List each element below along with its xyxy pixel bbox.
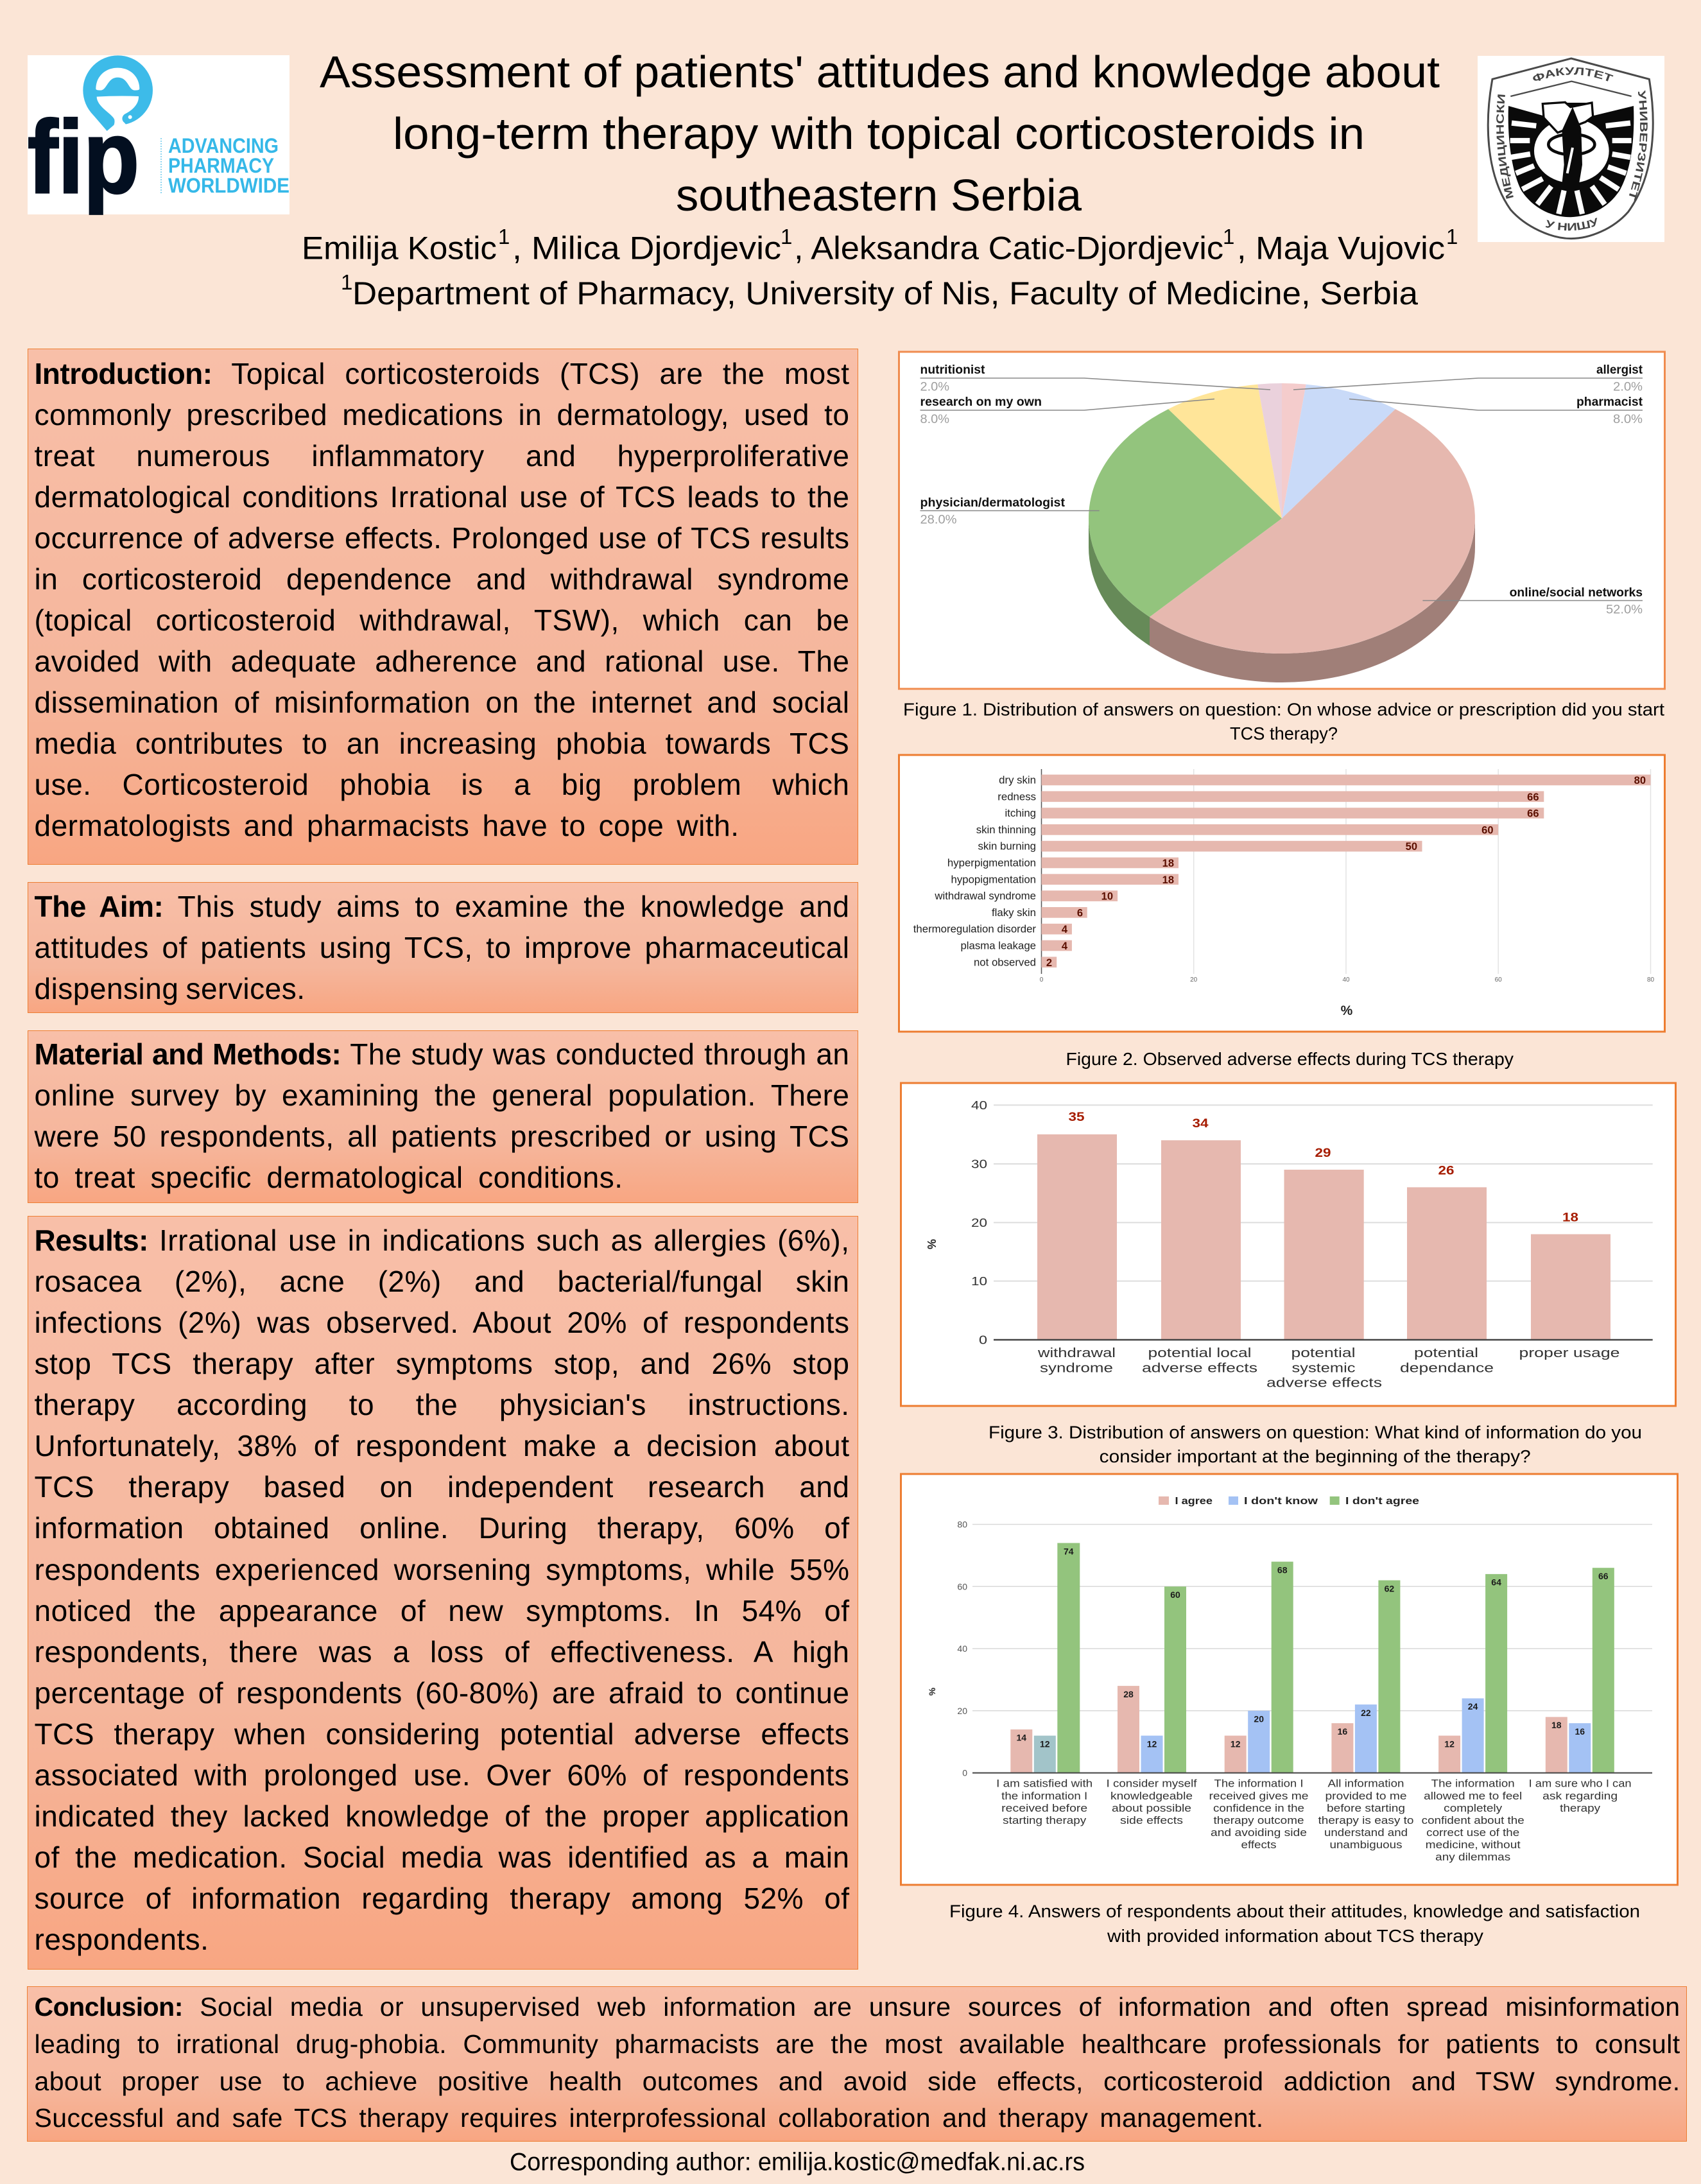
pie percentages: 2.0% [1613, 380, 1643, 394]
column values: 18 [1562, 1211, 1578, 1225]
text: results paragraph: Unfortunately, 38% of respondent make a decision about [35, 1429, 850, 1462]
group labels: side effects [1120, 1814, 1183, 1826]
text: results paragraph: respondents, there was a loss of effectiveness. A high [35, 1635, 850, 1668]
group labels: I am sure who I can [1529, 1777, 1632, 1790]
column categories: systemic [1291, 1361, 1356, 1375]
title: southeastern Serbia [676, 170, 1082, 220]
group labels: received gives me [1209, 1790, 1308, 1802]
text: introduction paragraph: media contributes to an increasing phobia towards TCS [35, 727, 850, 760]
pie labels: pharmacist [1576, 395, 1643, 409]
panel: figure 4 grouped column chart [901, 1474, 1678, 1885]
panel: conclusion [27, 1986, 1687, 2142]
text: advancing pharmacy worldwide tagline [168, 134, 289, 197]
bars: I don't know [1034, 1699, 1591, 1773]
authors: , Milica Djordjevic [512, 230, 781, 266]
bar values: 68 [1277, 1565, 1288, 1575]
authors [302, 225, 1458, 266]
group labels: allowed me to feel [1424, 1790, 1522, 1802]
caption: figure 3: Figure 3. Distribution of answers on question: What kind of information do you [989, 1423, 1642, 1442]
text: conclusion paragraph: Conclusion: Social media or unsupervised web information are unsure sources of information and often spread misinformation [35, 1992, 1680, 2022]
bar values: 12 [1444, 1738, 1455, 1749]
caption: figure 4 [949, 1902, 1640, 1946]
group labels: knowledgeable [1110, 1790, 1193, 1802]
logo: University of Nis medical faculty crest [1478, 56, 1664, 242]
authors: 1 [1446, 225, 1458, 248]
legend: I don't agree [1345, 1496, 1419, 1507]
column categories: dependance [1400, 1361, 1494, 1375]
caption: figure 1 [903, 700, 1664, 743]
column values: 26 [1438, 1165, 1455, 1177]
text: results paragraph: noticed the appearance of new symptoms. In 54% of [35, 1594, 850, 1627]
bar values: 60 [1170, 1590, 1180, 1600]
caption: figure 4: with provided information about TCS therapy [1107, 1926, 1483, 1946]
bar values [1046, 775, 1646, 969]
pie labels: nutritionist [920, 363, 985, 377]
bar values: 18 [1162, 858, 1174, 869]
text: introduction paragraph: (topical corticosteroid withdrawal, TSW), which can be [35, 603, 850, 637]
bar values: 74 [1064, 1546, 1074, 1556]
column values: 34 [1193, 1117, 1209, 1131]
x axis ticks: 40 [1342, 976, 1350, 984]
logo: FIP advancing pharmacy worldwide [28, 55, 289, 215]
group labels: provided to me [1325, 1790, 1407, 1802]
column categories: proper usage [1519, 1346, 1620, 1360]
x axis ticks: 80 [1647, 976, 1654, 984]
bar category labels: skin burning [978, 840, 1036, 853]
panel: the aim [28, 882, 858, 1013]
grid lines [994, 1105, 1653, 1281]
group labels: I consider myself [1107, 1777, 1197, 1790]
bar values: 60 [1481, 824, 1493, 836]
caption: figure 1: Figure 1. Distribution of answers on question: On whose advice or prescription did you start [903, 700, 1664, 719]
text: methods paragraph: online survey by examining the general population. There [35, 1079, 850, 1112]
columns [1037, 1134, 1610, 1340]
text: results paragraph: indicated they lacked knowledge of the proper application [35, 1799, 850, 1833]
grid lines [1194, 769, 1651, 974]
panel: results [28, 1216, 858, 1970]
x axis ticks: 0 [1040, 976, 1044, 984]
text: conclusion paragraph [35, 1992, 1680, 2133]
group labels [996, 1777, 1632, 1863]
pie percentages: 2.0% [920, 380, 949, 394]
x axis title: % [1341, 1003, 1353, 1018]
text: introduction paragraph: in corticosteroid dependence and withdrawal syndrome [35, 562, 850, 596]
text: results paragraph: rosacea (2%), acne (2%) and bacterial/fungal skin [35, 1265, 850, 1298]
bar category labels: hypopigmentation [951, 873, 1036, 885]
panel: material and methods [28, 1030, 858, 1203]
caption: figure 3 [989, 1423, 1642, 1466]
bar category labels: plasma leakage [960, 940, 1036, 951]
x axis ticks: 20 [1190, 976, 1198, 984]
legend: I don't know [1244, 1496, 1318, 1507]
panel: figure 2 horizontal bar chart [899, 755, 1665, 1032]
bar values: 20 [1254, 1714, 1264, 1724]
group labels: confident about the [1422, 1814, 1524, 1826]
pie labels: allergist [1596, 363, 1643, 377]
column values: 35 [1068, 1111, 1085, 1124]
group labels: starting therapy [1003, 1814, 1087, 1826]
y axis labels: 0 [979, 1334, 987, 1347]
text: aim paragraph [35, 890, 850, 1005]
text: results paragraph: percentage of respondents (60-80%) are afraid to continue [35, 1676, 850, 1710]
text: results paragraph: of the medication. Social media was identified as a main [35, 1841, 850, 1874]
bar values: 64 [1491, 1577, 1501, 1587]
bar category labels: thermoregulation disorder [913, 923, 1036, 935]
group labels: therapy [1560, 1802, 1601, 1814]
corresponding author: Corresponding author: emilija.kostic@medfak.ni.ac.rs [510, 2148, 1085, 2176]
legend [1159, 1496, 1419, 1507]
bar values: 80 [1634, 775, 1646, 786]
text: aim paragraph: dispensing services. [35, 972, 306, 1005]
pie percentages: 28.0% [920, 512, 956, 526]
group labels: therapy is easy to [1318, 1814, 1413, 1826]
text: methods paragraph: Material and Methods: The study was conducted through an [35, 1037, 850, 1071]
panel: figure 3 column chart [901, 1083, 1675, 1406]
pie percentages: 8.0% [1613, 412, 1643, 426]
group labels: The information I [1214, 1777, 1303, 1790]
bar values: 12 [1040, 1738, 1050, 1749]
text: introduction paragraph: treat numerous inflammatory and hyperproliferative [35, 439, 850, 472]
column categories: potential [1414, 1346, 1478, 1360]
text: introduction paragraph: commonly prescribed medications in dermatology, used to [35, 398, 850, 431]
authors: 1 [1223, 225, 1234, 248]
column values [1068, 1111, 1578, 1225]
text: aim paragraph: The Aim: This study aims to examine the knowledge and [35, 890, 850, 923]
group labels: medicine, without [1426, 1839, 1521, 1851]
group labels: I am satisfied with [996, 1777, 1092, 1790]
bar values: 12 [1147, 1738, 1157, 1749]
group labels: and avoiding side [1211, 1826, 1307, 1839]
group labels: unambiguous [1330, 1839, 1402, 1851]
text: results paragraph: associated with prolonged use. Over 60% of respondents [35, 1758, 850, 1792]
group labels: understand and [1324, 1826, 1408, 1839]
text: crest inscription: МЕДИЦИНСКИ [1496, 94, 1514, 199]
text: advancing pharmacy worldwide tagline: WORLDWIDE [168, 174, 289, 197]
text: results paragraph: information obtained online. During therapy, 60% of [35, 1511, 850, 1545]
group labels: The information [1431, 1777, 1515, 1790]
bars: I agree [1010, 1686, 1567, 1773]
authors: , Aleksandra Catic-Djordjevic [794, 230, 1223, 266]
bar category labels: not observed [974, 956, 1036, 968]
authors: 1 [498, 225, 510, 248]
group labels: received before [1001, 1802, 1087, 1814]
authors: , Maja Vujovic [1237, 230, 1445, 266]
title: Assessment of patients' attitudes and knowledge about [320, 47, 1440, 97]
bar values: 18 [1162, 874, 1174, 886]
text: advancing pharmacy worldwide tagline: PHARMACY [168, 154, 274, 177]
text: introduction paragraph: avoided with adequate adherence and rational use. The [35, 645, 850, 678]
bar category labels: redness [997, 790, 1036, 802]
group labels: ask regarding [1542, 1790, 1618, 1802]
bar values: 66 [1598, 1571, 1609, 1581]
caption: figure 1: TCS therapy? [1230, 724, 1338, 743]
column categories: syndrome [1040, 1361, 1113, 1375]
bar values: 2 [1046, 957, 1052, 969]
y axis title: % [927, 1687, 937, 1695]
text: conclusion paragraph: Successful and safe TCS therapy requires interprofessional collaboration and therapy management. [35, 2103, 1263, 2133]
y axis labels [957, 1519, 967, 1778]
y axis labels: 30 [971, 1158, 987, 1171]
column values: 29 [1315, 1147, 1331, 1160]
group labels: about possible [1112, 1802, 1191, 1814]
text: introduction paragraph: use. Corticosteroid phobia is a big problem which [35, 768, 850, 801]
text: introduction paragraph: dissemination of misinformation on the internet and social [35, 686, 850, 719]
x axis ticks [1040, 976, 1654, 984]
group labels: before starting [1327, 1802, 1405, 1814]
text: results paragraph: TCS therapy based on independent research and [35, 1470, 850, 1504]
bar category labels: skin thinning [976, 824, 1036, 836]
bar values: 24 [1468, 1701, 1478, 1712]
text: methods paragraph: to treat specific dermatological conditions. [35, 1161, 623, 1194]
group labels: therapy outcome [1213, 1814, 1304, 1826]
text: fip wordmark: fip [28, 100, 139, 215]
text: results paragraph: source of information regarding therapy among 52% of [35, 1882, 850, 1915]
y axis labels [971, 1099, 987, 1347]
y axis labels: 80 [957, 1519, 967, 1529]
bar values: 6 [1077, 907, 1083, 919]
y axis labels: 40 [957, 1643, 967, 1654]
affiliation: 1 [341, 270, 352, 294]
pie percentages: 52.0% [1606, 602, 1643, 616]
text: introduction paragraph: occurrence of adverse effects. Prolonged use of TCS results [35, 521, 850, 555]
column categories: adverse effects [1266, 1376, 1382, 1391]
text: introduction paragraph: Introduction: Topical corticosteroids (TCS) are the most [35, 357, 850, 390]
text: methods paragraph [35, 1037, 850, 1194]
text: crest inscription: У НИШУ [1546, 218, 1597, 231]
caption: figure 2: Figure 2. Observed adverse effects during TCS therapy [1066, 1049, 1514, 1069]
affiliation: Department of Pharmacy, University of Nis, Faculty of Medicine, Serbia [352, 275, 1418, 311]
legend: I agree [1175, 1496, 1213, 1507]
bars: adverse effects [1041, 775, 1651, 967]
text: conclusion paragraph: leading to irrational drug-phobia. Community pharmacists are the most available healthcare professionals for patients to consult [35, 2029, 1680, 2059]
text: advancing pharmacy worldwide tagline: ADVANCING [168, 134, 279, 157]
title: long-term therapy with topical corticosteroids in [393, 108, 1365, 159]
group labels: completely [1444, 1802, 1503, 1814]
text: introduction paragraph: dermatological conditions Irrational use of TCS leads to the [35, 480, 850, 514]
text: conclusion paragraph: about proper use to achieve positive health outcomes and avoid side effects, corticosteroid addiction and TSW syndrome. [35, 2067, 1680, 2096]
bar values: 16 [1575, 1726, 1585, 1737]
x axis ticks: 60 [1495, 976, 1502, 984]
column categories [1037, 1346, 1620, 1391]
authors: 1 [781, 225, 792, 248]
leader lines [920, 378, 1643, 601]
text: introduction paragraph [35, 357, 850, 842]
bar category labels: itching [1005, 807, 1036, 819]
bar values: 4 [1062, 924, 1068, 935]
pie percentages: 8.0% [920, 412, 949, 426]
bar values: 12 [1230, 1738, 1241, 1749]
bar values: 66 [1527, 792, 1539, 803]
text: introduction paragraph: dermatologists and pharmacists have to cope with. [35, 809, 739, 842]
bar values: 4 [1062, 940, 1068, 952]
pie labels: physician/dermatologist [920, 496, 1065, 510]
text: results paragraph: stop TCS therapy after symptoms stop, and 26% stop [35, 1347, 850, 1380]
caption: figure 3: consider important at the beginning of the therapy? [1100, 1446, 1531, 1466]
bar values: 16 [1338, 1726, 1347, 1737]
pie labels: research on my own [920, 395, 1042, 409]
icon: crest shield [1487, 58, 1654, 240]
authors: Emilija Kostic [302, 230, 497, 266]
text: results paragraph: TCS therapy when considering potential adverse effects [35, 1717, 850, 1751]
pie labels: online/social networks [1510, 585, 1643, 600]
group labels: any dilemmas [1435, 1851, 1510, 1863]
text: methods paragraph: were 50 respondents, all patients prescribed or using TCS [35, 1120, 850, 1153]
pie labels [920, 363, 1643, 600]
y axis labels: 0 [962, 1768, 967, 1778]
grid lines [972, 1524, 1652, 1711]
text: results paragraph [35, 1224, 850, 1956]
column categories: potential [1291, 1346, 1356, 1360]
group labels: effects [1241, 1839, 1276, 1851]
y axis title: % [926, 1239, 938, 1249]
y axis labels: 20 [957, 1706, 967, 1716]
bar category labels: flaky skin [992, 906, 1036, 919]
bar values: 10 [1101, 891, 1113, 903]
bar values: 14 [1017, 1732, 1026, 1742]
bar category labels: hyperpigmentation [947, 856, 1036, 869]
y axis labels: 10 [971, 1275, 987, 1288]
column categories: withdrawal [1037, 1346, 1116, 1360]
group labels: correct use of the [1426, 1826, 1519, 1839]
text: results paragraph: respondents. [35, 1923, 209, 1956]
y axis labels: 60 [957, 1581, 967, 1591]
group labels: the information I [1001, 1790, 1087, 1802]
group labels: All information [1327, 1777, 1404, 1790]
group labels: confidence in the [1213, 1802, 1304, 1814]
bar values: 66 [1527, 808, 1539, 820]
y axis labels: 40 [971, 1099, 987, 1112]
panel: introduction [28, 349, 858, 865]
bar values: 50 [1406, 841, 1417, 853]
bar category labels: dry skin [999, 774, 1036, 786]
bar values: 22 [1361, 1708, 1371, 1718]
panel: figure 1 pie chart [899, 352, 1665, 689]
bar values: 18 [1551, 1720, 1562, 1730]
title [320, 47, 1440, 220]
bar values: 28 [1123, 1689, 1134, 1699]
bars: I don't agree [1057, 1543, 1614, 1773]
text: crest inscription: ФАКУЛТЕТ [1533, 67, 1614, 82]
icon: FIP blue bowl and snake [83, 55, 153, 131]
bar values: 62 [1385, 1583, 1394, 1593]
bar category labels: withdrawal syndrome [934, 890, 1036, 902]
column categories: potential local [1148, 1346, 1252, 1360]
column categories: adverse effects [1142, 1361, 1257, 1375]
y axis labels: 20 [971, 1217, 987, 1229]
text: results paragraph: therapy according to the physician's instructions. [35, 1388, 850, 1421]
bar category labels [913, 774, 1036, 968]
text: results paragraph: Results: Irrational use in indications such as allergies (6%), [35, 1224, 850, 1257]
text: crest inscription [1496, 67, 1648, 231]
text: results paragraph: infections (2%) was observed. About 20% of respondents [35, 1306, 850, 1339]
caption: figure 4: Figure 4. Answers of respondents about their attitudes, knowledge and satisfaction [949, 1902, 1640, 1921]
text: crest inscription: УНИВЕРЗИТЕТ [1629, 90, 1648, 200]
bar values [1017, 1546, 1609, 1749]
text: aim paragraph: attitudes of patients using TCS, to improve pharmaceutical [35, 931, 850, 964]
pie percentages [920, 380, 1643, 616]
text: results paragraph: respondents experienced worsening symptoms, while 55% [35, 1552, 850, 1586]
pie chart: advice source [1089, 383, 1475, 682]
